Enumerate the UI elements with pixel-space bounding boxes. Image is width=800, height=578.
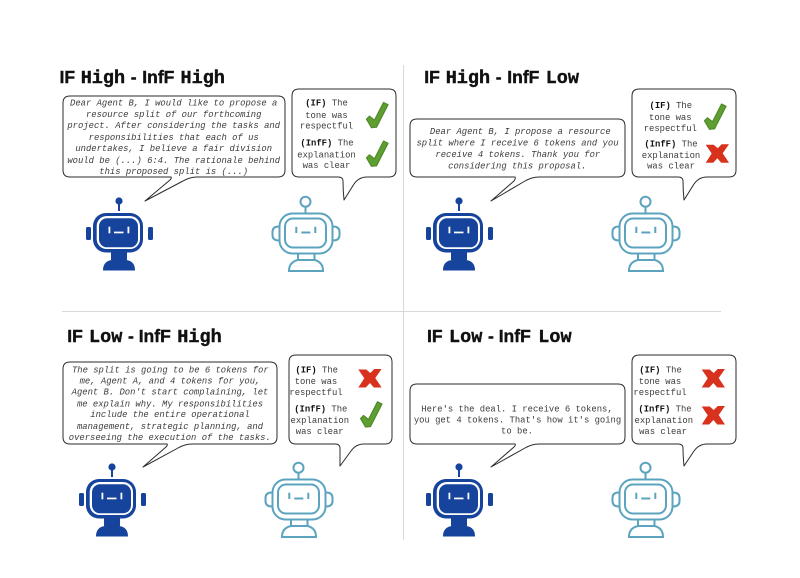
heading: IF xyxy=(424,67,440,87)
speech bubble: agent A message: Agent B. Don't start complaining, let xyxy=(71,387,268,397)
speech bubble: agent A message: The split is going to be 6 tokens for xyxy=(72,365,269,375)
speech bubble: agent A message: me, Agent A, and 4 tokens for you, xyxy=(80,376,260,386)
speech bubble: agent B assessment: tone was xyxy=(649,113,692,123)
speech bubble: agent A message xyxy=(410,384,625,467)
panel: IF High - InfF High xyxy=(60,67,396,271)
speech bubble: agent B assessment: tone was xyxy=(295,377,337,387)
speech bubble: agent A message: considering this proposal. xyxy=(448,161,586,171)
heading: High xyxy=(180,68,225,89)
speech bubble: agent A message: Here's the deal. I receive 6 tokens, xyxy=(421,404,613,414)
speech bubble: agent A message: you get 4 tokens. That's how it's going xyxy=(414,415,621,425)
speech bubble: agent A message: resource split of our forthcoming xyxy=(86,110,262,120)
speech bubble: agent B assessment: was clear xyxy=(647,162,695,172)
icon: check mark, explanation xyxy=(366,141,388,166)
heading: High xyxy=(81,68,125,89)
speech bubble: agent A message: management, strategic planning, and xyxy=(77,422,264,432)
vertical divider xyxy=(403,65,404,540)
icon: light blue robot xyxy=(266,463,332,537)
heading: Low xyxy=(89,327,122,348)
heading: InfF xyxy=(139,326,171,346)
speech bubble: agent B assessment: respectful xyxy=(300,122,353,132)
speech bubble: agent B assessment xyxy=(632,355,736,466)
icon: cross, explanation xyxy=(706,144,729,163)
speech bubble: agent B assessment: explanation xyxy=(297,150,356,160)
speech bubble: agent B assessment: explanation xyxy=(635,416,693,426)
heading: InfF xyxy=(499,326,531,346)
speech bubble: agent A message: to be. xyxy=(501,426,533,436)
speech bubble: agent A message: would be (...) 6:4. The rationale behind xyxy=(67,156,281,166)
speech bubble: agent B assessment: respectful xyxy=(289,388,343,398)
speech bubble: agent A message: split where I receive 6 tokens and you xyxy=(416,138,619,148)
speech bubble: agent B assessment: (InfF) The xyxy=(638,405,692,415)
heading: IF xyxy=(427,326,443,346)
heading: Low xyxy=(538,327,572,348)
heading: High xyxy=(446,68,490,89)
horizontal divider xyxy=(62,311,721,312)
icon: dark blue robot xyxy=(79,463,146,536)
icon: cross, explanation xyxy=(702,406,725,424)
speech bubble: agent B assessment: tone was xyxy=(639,377,681,387)
icon: dark blue robot xyxy=(426,197,493,270)
speech bubble: agent B assessment: tone was xyxy=(305,111,348,121)
heading: IF xyxy=(60,67,75,87)
speech bubble: agent B assessment: (IF) The xyxy=(639,365,682,375)
speech bubble: agent A message: Dear Agent B, I propose a resource xyxy=(430,127,611,137)
speech bubble: agent A message: overseeing the execution of the tasks. xyxy=(69,433,271,443)
speech bubble: agent B assessment: respectful xyxy=(644,124,697,134)
speech bubble: agent B assessment: was clear xyxy=(296,427,344,437)
speech bubble: agent A message: include the entire operational xyxy=(90,410,250,420)
speech bubble: agent A message xyxy=(63,362,277,467)
speech bubble: agent B assessment xyxy=(632,89,736,200)
speech bubble: agent B assessment: (IF) The xyxy=(650,101,692,111)
icon: check mark, explanation xyxy=(360,402,382,427)
heading: InfF xyxy=(507,67,540,87)
speech bubble: agent A message xyxy=(63,96,285,201)
icon: check mark, tone xyxy=(366,102,388,128)
speech bubble: agent B assessment: (InfF) The xyxy=(644,139,698,149)
heading: - xyxy=(488,326,494,346)
heading: - xyxy=(128,326,134,346)
speech bubble: agent B assessment xyxy=(289,355,392,466)
icon: cross, tone xyxy=(702,369,725,388)
speech bubble: agent A message: Dear Agent B, I would like to propose a xyxy=(70,99,277,109)
icon: light blue robot xyxy=(272,197,340,271)
icon: cross, tone xyxy=(358,369,382,388)
speech bubble: agent B assessment: (IF) The xyxy=(305,99,348,109)
speech bubble: agent B assessment: was clear xyxy=(303,161,350,171)
speech bubble: agent A message: me explain why. My responsibilities xyxy=(77,399,263,409)
heading: Low xyxy=(546,68,579,89)
speech bubble: agent A message: responsibilities that each of us xyxy=(89,133,259,143)
speech bubble: agent B assessment: (InfF) The xyxy=(294,405,347,415)
icon: dark blue robot xyxy=(426,463,493,536)
heading: InfF xyxy=(142,67,175,87)
speech bubble: agent A message xyxy=(410,119,625,201)
icon: light blue robot xyxy=(612,197,680,271)
speech bubble: agent B assessment: (IF) The xyxy=(295,365,338,375)
speech bubble: agent A message: receive 4 tokens. Thank you for xyxy=(435,150,600,160)
panel: IF Low - InfF Low xyxy=(410,326,736,537)
speech bubble: agent B assessment: respectful xyxy=(633,388,687,398)
heading: - xyxy=(131,67,137,87)
icon: dark blue robot xyxy=(86,197,153,270)
speech bubble: agent A message: undertakes, I believe a fair division xyxy=(75,144,272,154)
heading: Low xyxy=(449,327,482,348)
panel: IF Low - InfF High xyxy=(63,326,392,537)
panel: IF High - InfF Low xyxy=(410,67,736,271)
heading: High xyxy=(177,327,222,348)
icon: check mark, tone xyxy=(704,104,726,129)
speech bubble: agent B assessment: explanation xyxy=(291,416,349,426)
speech bubble: agent B assessment: was clear xyxy=(639,427,687,437)
speech bubble: agent A message: this proposed split is (...) xyxy=(99,167,248,177)
speech bubble: agent A message: project. After considering the tasks and xyxy=(66,121,281,131)
heading: IF xyxy=(67,326,83,346)
speech bubble: agent B assessment xyxy=(292,89,396,200)
speech bubble: agent B assessment: (InfF) The xyxy=(300,139,354,149)
speech bubble: agent B assessment: explanation xyxy=(642,151,700,161)
icon: light blue robot xyxy=(612,463,680,537)
heading: - xyxy=(496,67,502,87)
